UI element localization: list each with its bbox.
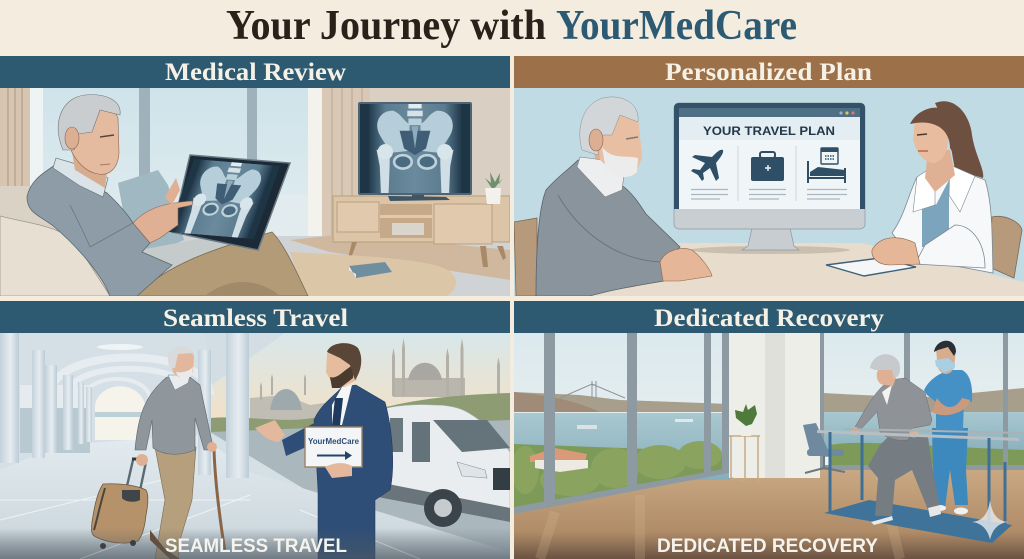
tv with x-ray [358,102,472,201]
panel: dedicated recovery [511,301,1024,559]
panel: medical review [0,56,510,296]
heading bar: personalized plan [514,56,1024,88]
cane [214,450,225,552]
therapist [924,341,972,514]
illustration: consultation with doctor [514,88,1024,296]
illustration: airport pickup with driver and van [0,333,510,559]
doctor [872,101,993,273]
sign: YourMedCare [308,436,359,446]
heading bar: seamless travel: Seamless Travel [163,305,348,332]
sign [305,427,362,467]
heading bar: dedicated recovery: Dedicated Recovery [654,305,885,332]
collar [53,158,108,197]
neck and head [72,153,107,188]
side table with plant [729,404,760,482]
heading bar: seamless travel [0,301,510,333]
panel: personalized plan [514,56,1024,296]
floor [0,435,510,559]
watermark sparkle [972,500,1008,540]
panel: seamless travel [0,301,510,559]
caption: SEAMLESS TRAVEL [165,536,347,557]
floor [160,236,510,296]
floor highlights [540,475,900,559]
heading bar: dedicated recovery [514,301,1024,333]
plant [485,172,503,204]
heading bar: medical review: Medical Review [165,59,346,86]
greeter in suit [255,343,393,559]
monitor [674,103,865,250]
columns [0,333,249,478]
centre wall [729,333,820,478]
heading bar: personalized plan: Personalized Plan [665,59,872,86]
tablet with x-ray [168,155,290,250]
far opening [95,386,145,440]
title brand name: YourMedCare [556,3,797,49]
sofa [0,186,108,292]
van [378,405,510,527]
road [210,420,510,559]
icon: airplane [691,150,723,181]
illustration: physiotherapy with Bosphorus view [511,333,1024,559]
table [569,243,1024,296]
distant mosques [250,338,500,420]
hand [133,201,193,243]
coffee table and book [290,252,456,296]
list lines [691,190,847,199]
left windows view [511,333,730,512]
sweater [27,165,172,296]
icon: bed and calendar [808,148,845,183]
parallel bars [817,428,1024,542]
arrow [317,451,352,460]
trousers [136,232,308,296]
monitor: YOUR TRAVEL PLAN [703,124,835,138]
suitcase [91,459,148,549]
right windows view [820,333,1024,470]
heading bar: medical review [0,56,510,88]
traveller [135,346,217,559]
illustration: man reviewing x-ray at home [0,88,510,296]
chairs [514,218,537,296]
cushion [118,170,184,250]
window frames [514,333,729,514]
caption: DEDICATED RECOVERY [657,536,878,557]
clipboard [826,258,916,276]
office chair [803,423,845,473]
caption shade [0,528,510,559]
tv stand [333,196,510,267]
patient [851,354,941,525]
title: Your Journey with [226,3,546,49]
arches [50,358,210,400]
older man [536,97,712,296]
icon: suitcase [751,152,784,181]
exercise mat [824,500,1012,543]
sky and skyline [211,350,510,433]
